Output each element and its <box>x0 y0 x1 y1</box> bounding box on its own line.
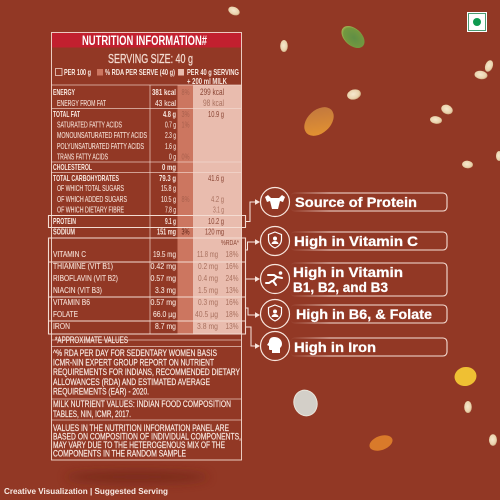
table header bar <box>52 32 242 48</box>
footnotes: COMPONENTS IN THE RANDOM SAMPLE <box>53 448 186 458</box>
callout: iron: High in Iron <box>294 339 376 355</box>
table rows: per serving values: 13% <box>226 285 239 295</box>
footnotes: REQUIREMENTS (EAR) - 2020. <box>53 386 149 396</box>
table rows: per 100 g values: 7.8 g <box>165 204 176 214</box>
table rows: % RDA values: 3% <box>182 226 190 236</box>
table rows: per 100 g values <box>150 87 176 331</box>
table rows: per 100 g values: 1.6 g <box>165 141 176 151</box>
footnotes: ALLOWANCES (RDA) AND ESTIMATED AVERAGE <box>53 377 210 387</box>
callout: vitamin c <box>260 226 447 256</box>
table rows: per serving values: 1.5 mg <box>198 285 218 295</box>
table rows: per serving values: 40.5 µg <box>195 309 218 319</box>
table rows: per 100 g values: 0 mg <box>162 162 176 172</box>
table rows: per 100 g values: 43 kcal <box>155 98 176 108</box>
table rows: per 100 g values: 0.57 mg <box>150 297 176 307</box>
table rows: names: PROTEIN <box>53 216 76 226</box>
footnotes <box>53 335 241 458</box>
table rows: names: POLYUNSATURATED FATTY ACIDS <box>57 141 144 151</box>
icon: shield person <box>268 305 282 321</box>
table rows: names: ENERGY FROM FAT <box>57 98 106 108</box>
table rows: per serving values: 4.2 g <box>211 194 224 204</box>
table rows: per 100 g values: 151 mg <box>157 226 176 236</box>
ingredients: scattered seeds and oats <box>227 5 500 446</box>
table rows: names: CHOLESTEROL <box>53 162 92 172</box>
table rows: names: OF WHICH DIETARY FIBRE <box>57 204 124 214</box>
callout: vitamin b1 b2 b3 <box>260 263 447 296</box>
ingredient: almond <box>299 101 339 142</box>
table rows: per serving values: 299 kcal <box>200 87 224 98</box>
footnotes: MILK NUTRIENT VALUES: INDIAN FOOD COMPOSITION <box>53 399 231 409</box>
callout: source of protein <box>260 188 447 216</box>
table rows: per 100 g values: 0.42 mg <box>150 261 176 271</box>
table rows: per 100 g values: 4.8 g <box>163 109 176 119</box>
table rows: per serving values: 10.2 g <box>208 216 224 226</box>
table rows: names: NIACIN (VIT B3) <box>53 285 102 295</box>
ingredient: raisin <box>367 432 395 454</box>
ground shadow <box>65 471 209 483</box>
table rows: per serving values: 24% <box>226 273 239 283</box>
table rows: names: OF WHICH TOTAL SUGARS <box>57 183 124 193</box>
table rows: names: IRON <box>53 321 70 331</box>
legend: % RDA PER SERVE (40 g) <box>105 67 175 77</box>
footnotes: TABLES, NIN, ICMR, 2017. <box>53 409 131 419</box>
icon: muscle torso <box>265 195 285 209</box>
footer note: Creative Visualization | Suggested Serving <box>4 486 168 496</box>
table rows: per 100 g values: 66.0 µg <box>153 309 176 319</box>
callout: vitamin b1 b2 b3: High in Vitamin <box>293 264 403 280</box>
callout: source of protein: Source of Protein <box>295 194 417 210</box>
table rows: per serving values: 41.6 g <box>208 173 224 183</box>
ingredient: chia seed <box>290 387 321 419</box>
table rows: names: MONOUNSATURATED FATTY ACIDS <box>57 130 147 140</box>
table rules and outline <box>48 32 246 460</box>
panel: nutrition table <box>48 32 246 460</box>
legend <box>56 67 239 86</box>
ingredient: yellow lentil <box>453 365 478 388</box>
footnotes: REQUIREMENTS FOR INDIANS, RECOMMENDED DIETARY <box>53 367 240 377</box>
callout: vitamin c: High in Vitamin C <box>294 233 418 249</box>
footnotes: MAY VARY DUE TO THE HETEROGENOUS MIX OF THE <box>53 440 225 450</box>
serving size: SERVING SIZE: 40 g <box>108 52 193 66</box>
icon: shield person <box>268 232 282 248</box>
table rows: per 100 g values: 19.5 mg <box>153 249 176 259</box>
table rows: names: ENERGY <box>53 87 75 97</box>
veg mark <box>467 12 487 32</box>
table rows: % RDA values: 3% <box>182 109 190 119</box>
legend: PER 40 g SERVING <box>187 67 239 77</box>
table rows: names: OF WHICH ADDED SUGARS <box>57 194 127 204</box>
table rows: per 100 g values: 381 kcal <box>152 87 176 97</box>
table rows: per serving values: 18% <box>226 249 239 259</box>
table rows: per serving values: 11.8 mg <box>197 249 218 259</box>
footnotes: BASED ON COMPOSITION OF INDIVIDUAL COMPONENTS, <box>53 432 241 442</box>
table rows: per serving values: 16% <box>226 297 239 307</box>
table rows: names: FOLATE <box>53 309 78 319</box>
table rows: per 100 g values: 3.3 mg <box>155 285 176 295</box>
table rows: names: TRANS FATTY ACIDS <box>57 152 108 162</box>
table rows: per 100 g values: 0 g <box>169 152 176 162</box>
callout: b6 and folate: High in B6, & Folate <box>296 306 432 322</box>
callout: vitamin b1 b2 b3: B1, B2, and B3 <box>293 279 388 295</box>
table rows: % RDA values: 0% <box>182 152 190 162</box>
table rows: names: SATURATED FATTY ACIDS <box>57 120 122 130</box>
table rows: per serving values: 0.2 mg <box>198 261 218 271</box>
table rows: per serving values: 98 kcal <box>203 98 224 109</box>
table rows: per 100 g values: 0.7 g <box>165 120 176 130</box>
column shading <box>178 85 242 334</box>
table rows: names: VITAMIN C <box>53 249 86 259</box>
callout: b6 and folate <box>260 300 447 328</box>
table rows: names: RIBOFLAVIN (VIT B2) <box>53 273 118 283</box>
icon: runner <box>266 271 282 285</box>
table rows: % RDA values: 1% <box>182 120 190 130</box>
table rows: per serving values: %RDA* <box>221 238 239 247</box>
table rows: % RDA values: 8% <box>182 194 190 204</box>
table rows: per 100 g values: 9.1 g <box>165 216 176 226</box>
footnotes: ICMR-NIN EXPERT GROUP REPORT ON NUTRIENT <box>53 358 214 368</box>
legend: PER 100 g <box>64 67 91 77</box>
table rows: per serving values: 3.8 mg <box>197 321 218 331</box>
table rows: names <box>53 87 147 331</box>
table rows: per 100 g values: 79.3 g <box>159 173 176 183</box>
table rows: per serving values: 3.1 g <box>213 204 224 214</box>
connector arrows <box>246 200 259 348</box>
legend: + 200 ml MILK <box>187 76 228 86</box>
footnotes: *APPROXIMATE VALUES <box>55 335 128 345</box>
table rows: per serving values: 13% <box>226 321 239 331</box>
table rows: per serving values: 0.3 mg <box>198 297 218 307</box>
callout: iron <box>260 332 447 360</box>
table rows: per serving values: 16% <box>226 261 239 271</box>
table rows: per 100 g values: 10.5 g <box>161 194 176 204</box>
table rows: names: TOTAL FAT <box>53 109 80 119</box>
table rows: per serving values: 0.4 mg <box>198 273 218 283</box>
table rows: % RDA values <box>182 87 190 236</box>
table rows: per 100 g values: 2.3 g <box>165 130 176 140</box>
table rows: % RDA values: 8% <box>182 87 190 97</box>
table rows: per 100 g values: 15.8 g <box>161 183 176 193</box>
footnotes: ^% RDA PER DAY FOR SEDENTARY WOMEN BASIS <box>53 348 217 358</box>
table rows: per serving values: 18% <box>226 309 239 319</box>
table rows: per serving values <box>195 87 239 331</box>
footnotes: VALUES IN THE NUTRITION INFORMATION PANEL ARE <box>53 423 229 433</box>
table title: NUTRITION INFORMATION# <box>82 33 207 48</box>
table rows: names: VITAMIN B6 <box>53 297 90 307</box>
table rows: per 100 g values: 8.7 mg <box>155 321 176 331</box>
icon: head with brain <box>267 337 282 353</box>
table rows: names: SODIUM <box>53 226 75 236</box>
table rows: names: THIAMINE (VIT B1) <box>53 261 113 271</box>
table rows: per serving values: 10.9 g <box>208 109 224 119</box>
table rows: per 100 g values: 0.57 mg <box>150 273 176 283</box>
table rows: per serving values: 120 mg <box>205 226 224 236</box>
table rows: names: TOTAL CARBOHYDRATES <box>53 173 119 183</box>
ingredient: pumpkin seed <box>337 22 369 52</box>
